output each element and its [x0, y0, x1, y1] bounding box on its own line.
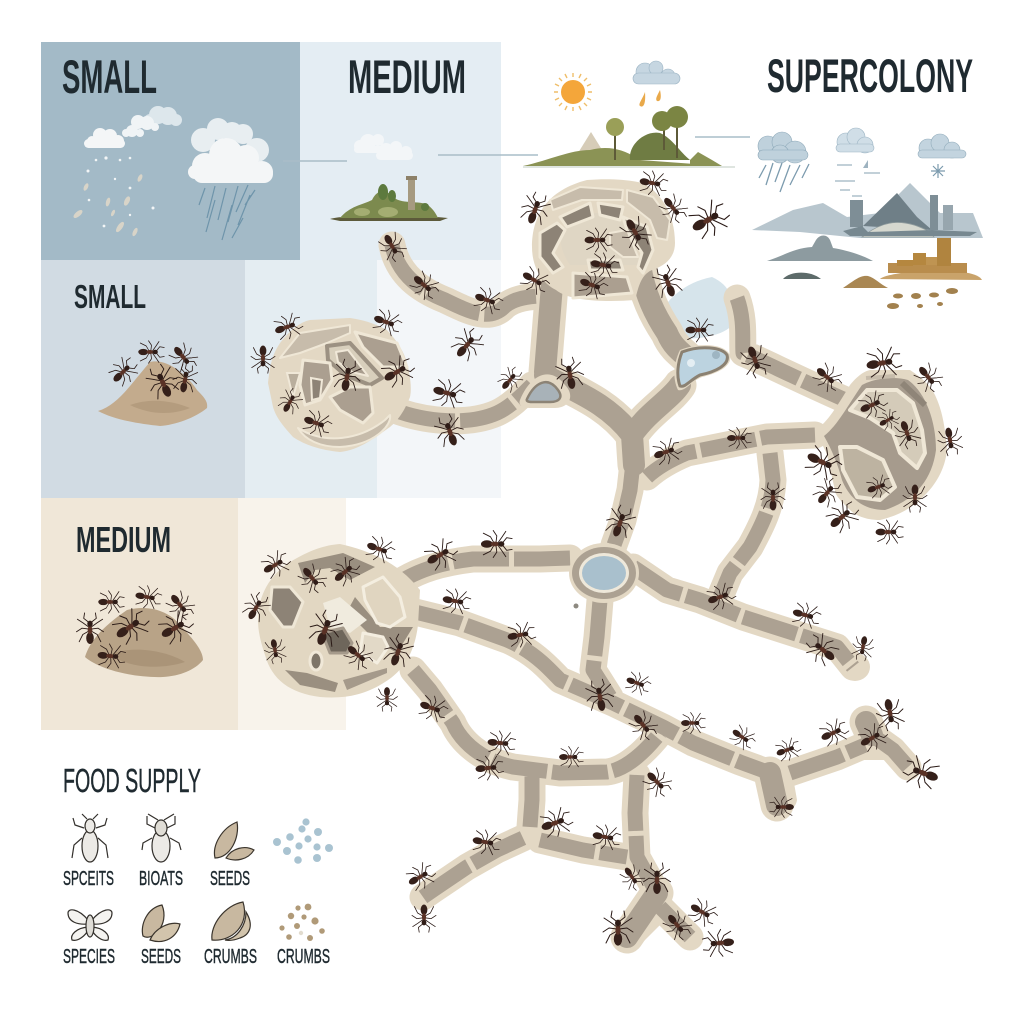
nest: top: [532, 179, 675, 301]
tunnel network: [392, 245, 918, 945]
panel: top medium: [300, 42, 501, 260]
panel: middle small: [41, 260, 245, 498]
mound: medium: [85, 608, 203, 677]
heading: medium mound: MEDIUM: [76, 519, 171, 560]
label: bioats: BIOATS: [139, 868, 183, 890]
outer junction fills: [618, 653, 918, 945]
heading: small mound: SMALL: [74, 278, 146, 315]
panel: middle light tint: [377, 260, 501, 498]
supercolony climate: storms, cities and mounds: [752, 128, 983, 309]
heading: small: SMALL: [62, 50, 157, 103]
speck near central pond: [574, 604, 578, 608]
icon: insect one: [72, 814, 108, 862]
pocket chamber: [519, 374, 570, 408]
panel: lower tint: [238, 498, 346, 730]
panel: top small: [41, 42, 300, 260]
connector lines: [283, 137, 750, 161]
icon: seeds two: [142, 905, 180, 942]
food supply legend: [63, 762, 333, 968]
panel: lower medium: [41, 498, 238, 730]
blue water patch behind the network: [657, 277, 735, 338]
icon: sun: [554, 73, 592, 111]
small climate: clouds with light rain: [72, 106, 273, 240]
clouds and rain: [758, 128, 966, 196]
heading: medium: MEDIUM: [348, 50, 466, 103]
icon: seeds one: [214, 822, 254, 860]
icon: raindrops: [639, 90, 661, 107]
panel: middle tint: [245, 260, 377, 498]
medium climate: cloud and green island: [330, 134, 448, 221]
label: crumbs one: CRUMBS: [204, 946, 257, 968]
heading: food supply: FOOD SUPPLY: [63, 762, 201, 799]
icon: winged insect: [68, 910, 112, 940]
label: species: SPECIES: [63, 946, 115, 968]
nest: right: [815, 370, 947, 520]
label: crumbs two: CRUMBS: [277, 946, 330, 968]
island: [523, 106, 735, 167]
nest: lower left: [258, 544, 420, 697]
label: seeds: SEEDS: [210, 868, 250, 890]
mountains and city: [752, 183, 983, 279]
pond: upper: [674, 345, 730, 390]
icon: crumbs: [279, 904, 325, 941]
pond: central: [569, 543, 639, 603]
icon: insect two: [142, 814, 181, 862]
icon: seeds three: [212, 902, 250, 940]
brown buildings and mounds: [843, 238, 982, 309]
nest: left: [268, 318, 411, 452]
label: spceits: SPCEITS: [63, 868, 114, 890]
label: seeds lower: SEEDS: [141, 946, 181, 968]
ants: [76, 169, 964, 958]
icon: cloud: [633, 61, 680, 84]
mound: small: [98, 361, 207, 426]
large climate: sun, cloud and island: [523, 61, 735, 167]
icon: water droplets: [273, 818, 333, 864]
